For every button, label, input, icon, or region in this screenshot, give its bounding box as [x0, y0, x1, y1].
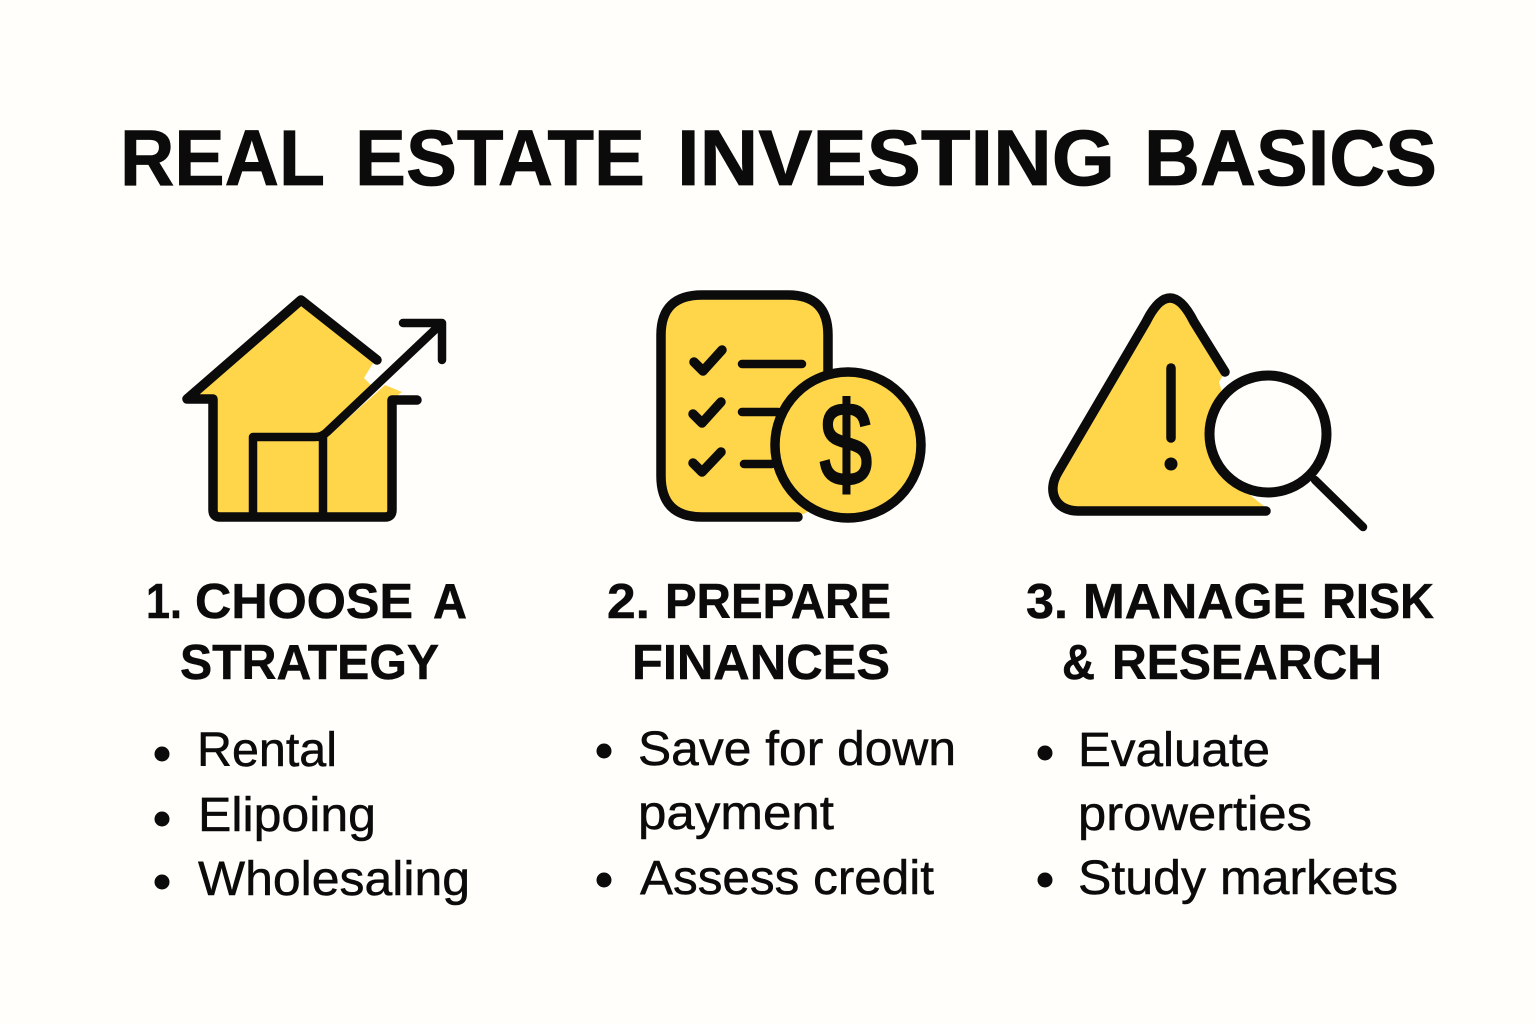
bullet list: finances: Assess credit: [640, 852, 934, 905]
heading: prepare finances: 2.: [607, 575, 650, 629]
heading: manage risk and research: 3.: [1026, 575, 1068, 629]
title: BASICS: [1144, 113, 1437, 202]
bullet list: strategies: Elipoing: [198, 789, 376, 842]
bullet list: risk and research: Evaluate: [1078, 724, 1270, 777]
bullet list: strategies: [154, 724, 470, 906]
bullet list: strategies: Rental: [197, 724, 337, 777]
heading: choose a strategy: [146, 575, 467, 690]
title: INVESTING: [677, 113, 1115, 202]
heading: prepare finances: FINANCES: [632, 636, 890, 690]
bullet list: risk and research: [1038, 724, 1398, 905]
icon: house with rising arrow: [187, 300, 442, 517]
icon: warning triangle with magnifier: [1053, 298, 1363, 527]
title: ESTATE: [355, 113, 645, 202]
bullet list: finances: payment: [638, 787, 834, 840]
heading: manage risk and research: [1026, 575, 1434, 690]
title: REAL: [120, 113, 325, 202]
bullet list: risk and research: Study markets: [1078, 852, 1398, 905]
heading: choose a strategy: 1.: [146, 575, 182, 629]
bullet list: risk and research: prowerties: [1078, 788, 1312, 841]
panel: manage risk and research: [1026, 298, 1434, 905]
heading: manage risk and research: &: [1062, 636, 1095, 690]
bullet list: strategies: Wholesaling: [198, 853, 470, 906]
heading: prepare finances: PREPARE: [665, 575, 891, 629]
panel: choose a strategy: [146, 300, 470, 906]
heading: prepare finances: [607, 575, 891, 690]
heading: choose a strategy: STRATEGY: [180, 636, 439, 690]
bullet list: finances: [596, 723, 956, 905]
heading: manage risk and research: MANAGE: [1083, 575, 1306, 629]
title: [120, 113, 1437, 202]
heading: choose a strategy: A: [433, 575, 467, 629]
panel: prepare finances: [596, 295, 956, 905]
bullet list: finances: Save for down: [638, 723, 956, 776]
icon: checklist with dollar coin: [661, 295, 921, 518]
heading: manage risk and research: RISK: [1322, 575, 1434, 629]
heading: choose a strategy: CHOOSE: [195, 575, 413, 629]
icon: checklist with dollar coin: $: [820, 379, 872, 511]
heading: manage risk and research: RESEARCH: [1112, 636, 1382, 690]
